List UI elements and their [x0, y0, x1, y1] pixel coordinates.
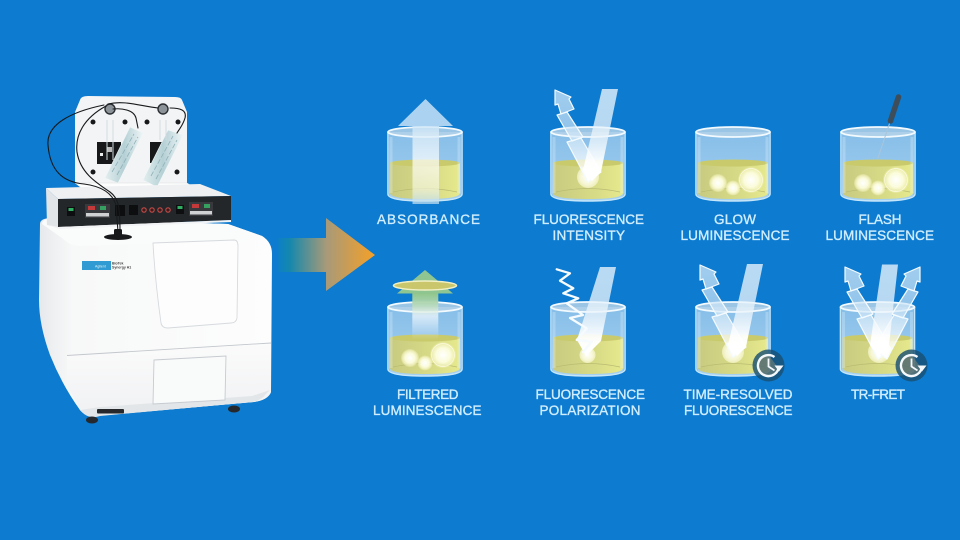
beaker	[551, 127, 625, 201]
icon: glowing wells	[854, 167, 909, 196]
panel: fluorescence intensity	[534, 89, 644, 243]
icon: light transmission arrow	[398, 99, 453, 204]
icon: injector dropper	[878, 97, 898, 158]
beaker	[551, 302, 625, 376]
icon: sample spot	[580, 347, 596, 363]
fittings	[105, 104, 168, 114]
icon: excitation beam	[870, 264, 898, 356]
icon: filter disc	[394, 281, 456, 290]
label	[826, 212, 934, 243]
lower door	[153, 356, 226, 404]
label: GLOW	[714, 212, 756, 227]
connectors	[142, 208, 170, 212]
beaker	[840, 302, 914, 376]
label: FLUORESCENCE	[684, 403, 792, 418]
controller box	[46, 184, 231, 229]
instrument: plate reader with injector	[39, 96, 272, 424]
beaker	[696, 127, 770, 201]
beaker	[841, 127, 915, 201]
label: ABSORBANCE	[377, 212, 480, 227]
icon: excitation beam	[577, 267, 616, 356]
label: FILTERED	[397, 387, 459, 402]
icon: sample spot	[577, 166, 599, 188]
label	[373, 387, 482, 418]
syringes	[105, 120, 183, 187]
beaker	[696, 302, 770, 376]
label: POLARIZATION	[540, 403, 640, 418]
tube port	[104, 229, 132, 240]
label: LUMINESCENCE	[680, 228, 790, 243]
label: LUMINESCENCE	[826, 228, 934, 243]
icon: polarized wave	[557, 269, 592, 352]
label: TIME-RESOLVED	[684, 387, 793, 402]
icon: clock badge	[896, 350, 928, 382]
label	[684, 387, 793, 418]
beaker	[388, 302, 462, 376]
icon: excitation beam	[583, 89, 618, 181]
label: FLUORESCENCE	[534, 212, 644, 227]
icon: sample spot	[868, 341, 890, 363]
icon: filtered light arrow	[397, 270, 453, 340]
label	[536, 387, 645, 418]
main reader body	[39, 218, 272, 417]
icon: right emission arrow	[874, 267, 920, 359]
brand label: Agilent	[95, 264, 106, 268]
label	[680, 212, 790, 243]
label	[534, 212, 644, 243]
temperature displays	[85, 202, 213, 218]
brand label: BioTek	[112, 262, 123, 266]
panel: flash luminescence	[826, 97, 934, 243]
controller switches	[67, 205, 184, 216]
panel: filtered luminescence	[373, 270, 482, 418]
feet	[86, 406, 240, 424]
label: FLASH	[858, 212, 902, 227]
injector top panel	[75, 96, 200, 194]
arrow: gradient pointing right	[278, 218, 375, 291]
label: FLUORESCENCE	[536, 387, 645, 402]
panel: glow luminescence	[680, 127, 790, 243]
icon: emission arrow	[700, 265, 746, 357]
brand label	[82, 261, 131, 270]
panel: TR-FRET	[840, 264, 928, 402]
icon: sample spot	[722, 341, 744, 363]
panel: time-resolved fluorescence	[684, 264, 793, 418]
beaker	[388, 127, 462, 201]
label: INTENSITY	[552, 228, 625, 243]
panel: fluorescence polarization	[536, 267, 645, 418]
front slot	[97, 409, 124, 414]
upper door	[153, 240, 238, 328]
icon: left emission arrow	[845, 267, 891, 359]
icon: clock badge	[752, 350, 784, 382]
panel: absorbance	[377, 99, 480, 227]
icon: emission arrow	[555, 90, 601, 182]
cables	[48, 103, 185, 232]
brand label: Synergy H1	[112, 266, 131, 270]
icon: glowing wells	[401, 342, 456, 370]
label: TR-FRET	[851, 387, 905, 402]
label: LUMINESCENCE	[373, 403, 482, 418]
icon: glowing wells	[709, 167, 764, 196]
icon: excitation beam	[728, 264, 763, 356]
